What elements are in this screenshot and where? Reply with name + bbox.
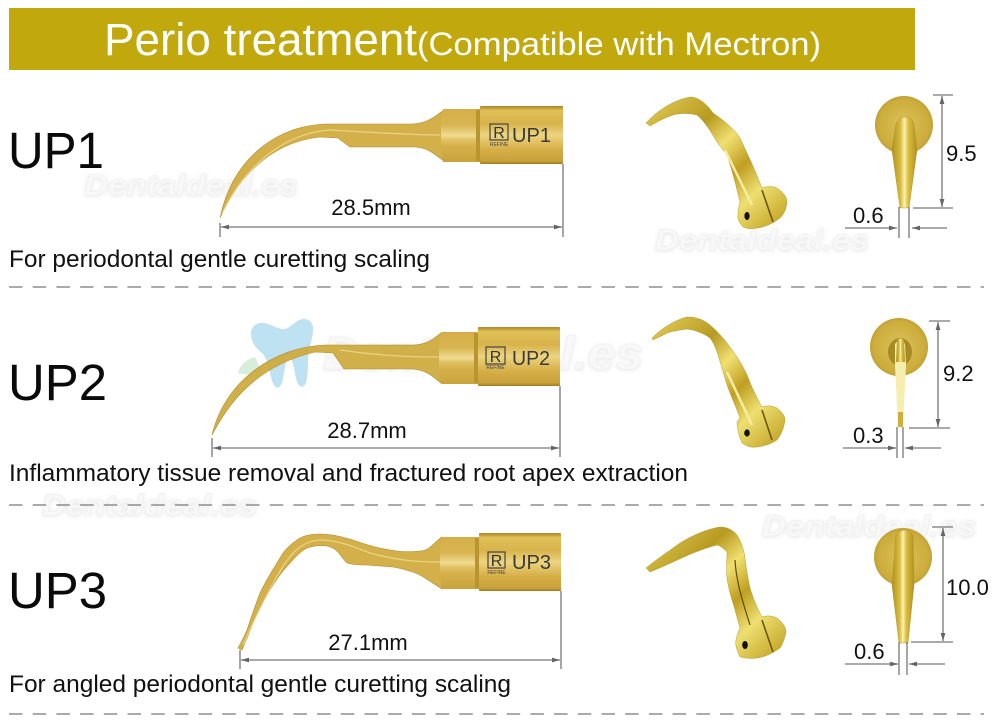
UP1 description: For periodontal gentle curetting scaling [9, 246, 430, 273]
watermark 5: Dentaldeal.es [762, 510, 976, 543]
UP2 front view with dimensions: 9.2 [943, 361, 974, 386]
header band [9, 8, 915, 70]
UP3 label: UP3 [8, 562, 107, 619]
icon: tooth logo [238, 319, 313, 388]
watermark 3: Dentaldeal.es [323, 327, 643, 379]
UP1 length dimension: 28.5mm [331, 195, 411, 220]
watermark 1: Dentaldeal.es [84, 169, 298, 202]
UP2 tip side profile: UP2 [512, 348, 550, 370]
UP1 tip side profile [220, 106, 563, 218]
UP3 perspective view [646, 527, 786, 658]
subtitle: (Compatible with Mectron) [417, 26, 821, 62]
UP1 length dimension [220, 164, 563, 237]
title: Perio treatment [104, 14, 418, 65]
UP2 label: UP2 [8, 354, 107, 411]
section UP3 [8, 527, 989, 698]
watermark 4: Dentaldeal.es [42, 489, 257, 522]
section UP1 [8, 95, 977, 273]
UP1 perspective view [646, 97, 787, 229]
UP3 front view with dimensions: 10.0 [946, 575, 989, 600]
UP1 tip side profile: UP1 [512, 125, 551, 147]
UP2 tip side profile: REFINE [486, 365, 505, 371]
UP3 length dimension: 27.1mm [328, 630, 408, 655]
UP3 front view with dimensions: 0.6 [854, 639, 885, 664]
UP1 tip side profile: REFINE [490, 142, 509, 148]
UP2 tip side profile: R [490, 349, 501, 366]
UP2 perspective view [652, 317, 785, 447]
UP1 label: UP1 [8, 122, 104, 179]
UP2 front view with dimensions: 0.3 [853, 423, 884, 448]
UP2 length dimension: 28.7mm [327, 418, 407, 443]
UP3 length dimension [240, 591, 561, 669]
UP3 tip side profile: UP3 [512, 552, 551, 574]
UP2 front view with dimensions [843, 318, 974, 458]
UP1 front view with dimensions: 0.6 [853, 203, 884, 228]
watermark 2: Dentaldeal.es [655, 224, 869, 257]
UP2 description: Inflammatory tissue removal and fractured root apex extraction [9, 460, 688, 487]
UP3 front view with dimensions [845, 527, 989, 675]
UP3 tip side profile: REFINE [487, 570, 506, 576]
UP2 tip side profile [212, 327, 560, 435]
UP1 front view with dimensions: 9.5 [946, 141, 977, 166]
UP3 tip side profile: R [491, 553, 502, 570]
UP3 description: For angled periodontal gentle curetting scaling [9, 671, 511, 698]
UP3 tip side profile [238, 533, 561, 650]
UP2 length dimension [212, 386, 560, 457]
UP1 tip side profile: R [493, 125, 505, 142]
section UP2 [8, 317, 974, 487]
UP1 front view with dimensions [845, 95, 977, 238]
